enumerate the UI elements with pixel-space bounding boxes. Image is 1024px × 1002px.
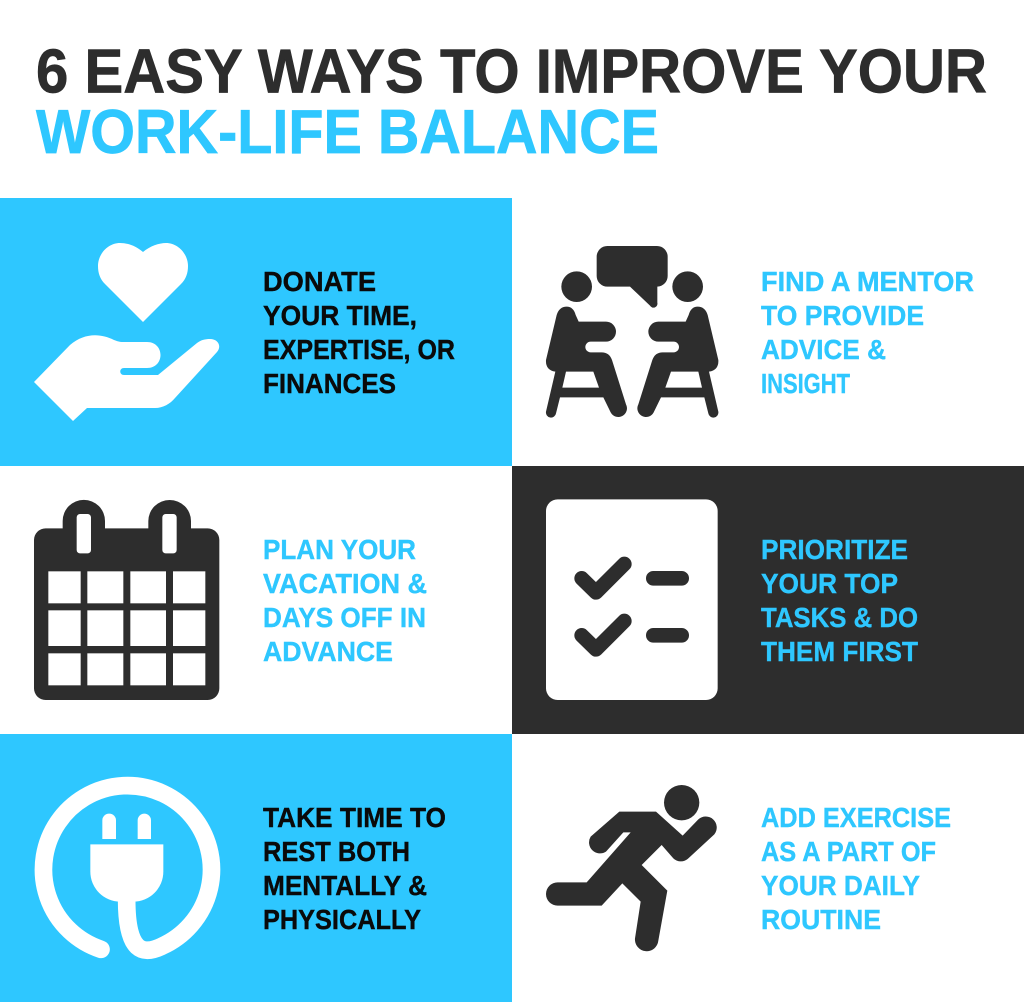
icon: two people talking bbox=[546, 246, 718, 418]
text: mentor: FIND A MENTOR bbox=[761, 266, 974, 297]
text: exercise: AS A PART OF bbox=[761, 836, 936, 867]
text: donate: YOUR TIME, bbox=[263, 300, 417, 331]
text: mentor: TO PROVIDE bbox=[761, 300, 924, 331]
icon: plug bbox=[43, 786, 211, 950]
panel: exercise bbox=[546, 785, 951, 951]
text: donate: DONATE bbox=[263, 266, 376, 297]
text: prioritize: THEM FIRST bbox=[761, 636, 918, 667]
text: exercise bbox=[761, 802, 951, 935]
text: vacation: DAYS OFF IN bbox=[263, 602, 426, 633]
title: WORK-LIFE BALANCE bbox=[36, 98, 659, 167]
text: vacation bbox=[263, 534, 427, 667]
text: prioritize bbox=[761, 534, 918, 667]
title: 6 EASY WAYS TO IMPROVE YOUR bbox=[36, 38, 987, 106]
panel: mentor bbox=[546, 246, 974, 418]
text: vacation: VACATION & bbox=[263, 568, 427, 599]
panel: rest bbox=[0, 734, 512, 1002]
text: donate: EXPERTISE, OR bbox=[263, 334, 455, 365]
text: prioritize: PRIORITIZE bbox=[761, 534, 908, 565]
text: exercise: YOUR DAILY bbox=[761, 870, 920, 901]
text: mentor: ADVICE & bbox=[761, 334, 886, 365]
text: mentor bbox=[761, 266, 974, 399]
panel: vacation bbox=[34, 500, 427, 700]
panel: prioritize bbox=[512, 466, 1024, 734]
text: vacation: PLAN YOUR bbox=[263, 534, 416, 565]
text: donate bbox=[263, 266, 455, 399]
text: rest: TAKE TIME TO bbox=[263, 802, 446, 833]
text: exercise: ROUTINE bbox=[761, 904, 881, 935]
text: vacation: ADVANCE bbox=[263, 636, 393, 667]
text: exercise: ADD EXERCISE bbox=[761, 802, 951, 833]
panel: donate bbox=[0, 198, 512, 466]
text: mentor: INSIGHT bbox=[761, 368, 850, 399]
text: rest: REST BOTH bbox=[263, 836, 410, 867]
icon: runner bbox=[546, 785, 717, 951]
text: prioritize: TASKS & DO bbox=[761, 602, 918, 633]
text: prioritize: YOUR TOP bbox=[761, 568, 898, 599]
text: donate: FINANCES bbox=[263, 368, 396, 399]
text: rest: PHYSICALLY bbox=[263, 904, 421, 935]
icon: calendar bbox=[34, 500, 219, 700]
icon: checklist bbox=[546, 499, 718, 700]
icon: heart in hand bbox=[34, 243, 219, 421]
title bbox=[36, 38, 987, 167]
text: rest bbox=[263, 802, 446, 935]
text: rest: MENTALLY & bbox=[263, 870, 427, 901]
